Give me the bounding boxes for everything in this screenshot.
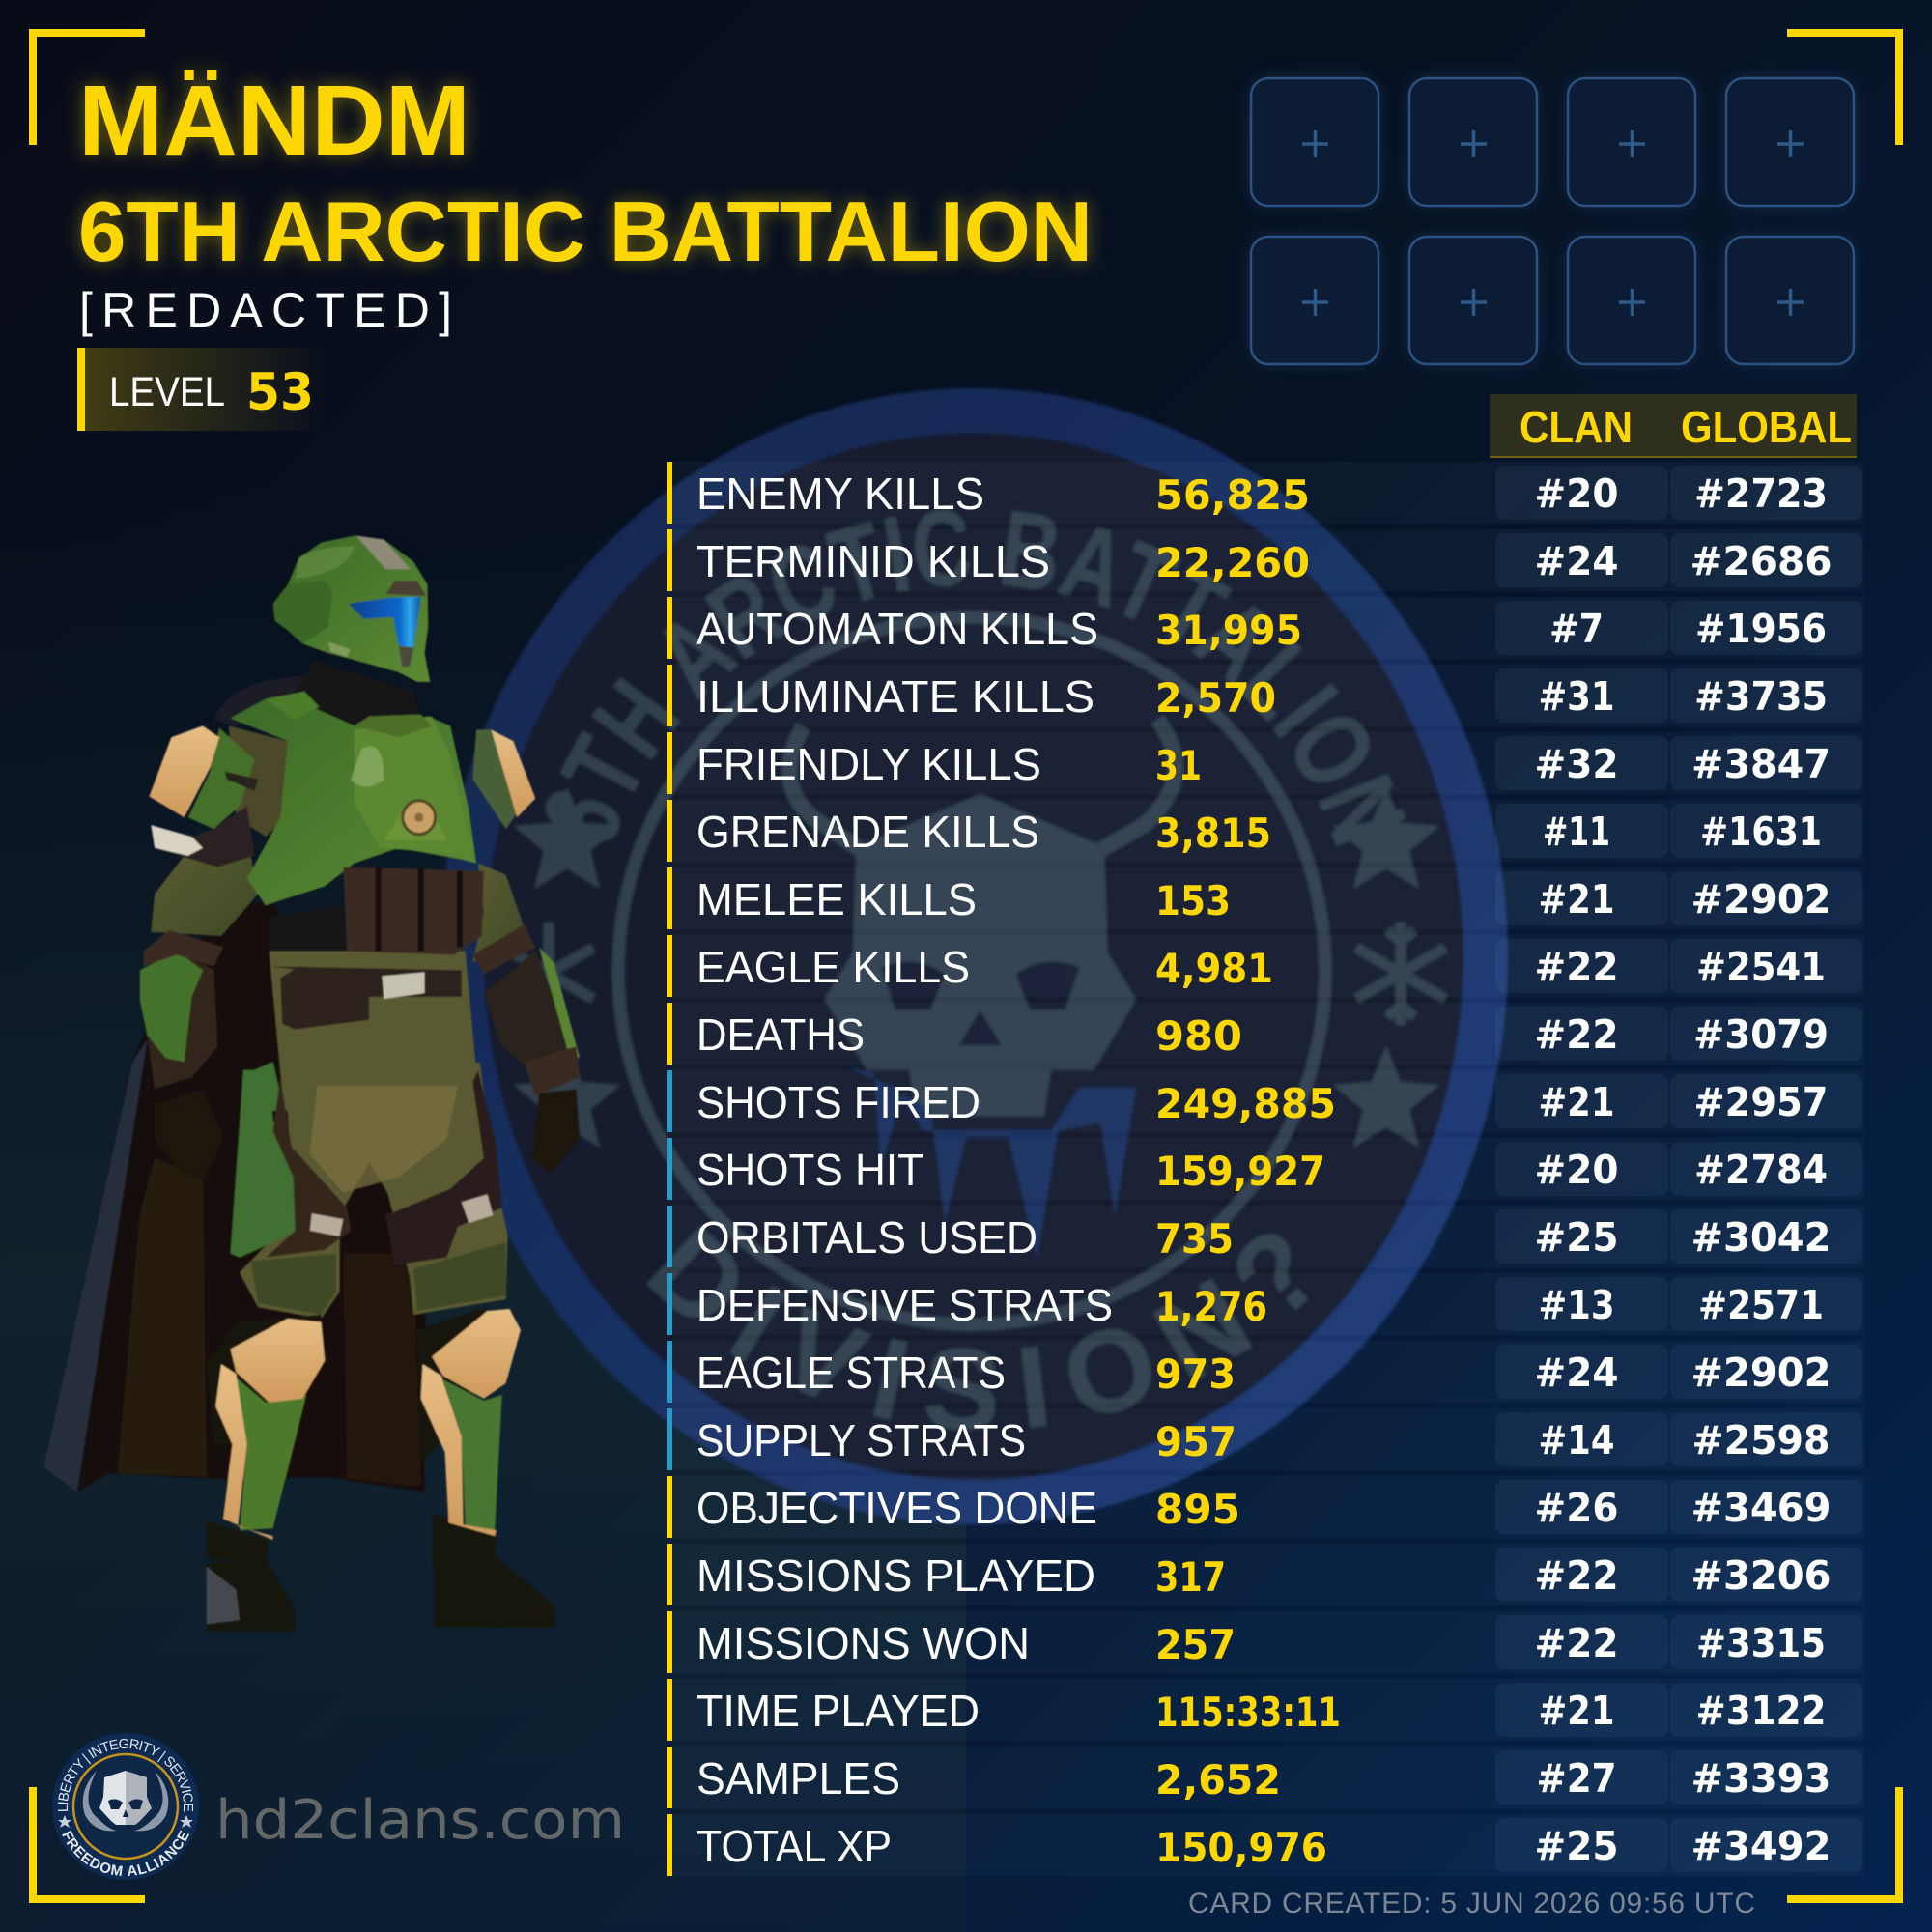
stat row: time played bbox=[667, 1679, 1864, 1741]
upper body bbox=[140, 536, 580, 1111]
stat row: friendly kills bbox=[667, 732, 1864, 794]
stat row: automaton kills: AUTOMATON KILLS bbox=[696, 604, 1098, 654]
stat row: shots fired: SHOTS FIRED bbox=[696, 1077, 980, 1127]
right arm bbox=[472, 864, 525, 962]
stat row: eagle strats: 973 bbox=[1155, 1350, 1236, 1398]
stat row: objectives done: #3469 bbox=[1690, 1485, 1832, 1531]
stat row: automaton kills bbox=[667, 597, 1864, 659]
redacted subtitle: [REDACTED] bbox=[79, 283, 452, 337]
stat row: grenade kills: #11 bbox=[1543, 809, 1610, 855]
logo skull eyes bbox=[108, 1799, 143, 1817]
stat row: friendly kills: 31 bbox=[1155, 742, 1202, 789]
rank column headers: CLAN bbox=[1520, 402, 1633, 452]
stat row: shots hit bbox=[667, 1138, 1864, 1200]
stat row: total xp: TOTAL XP bbox=[696, 1821, 892, 1871]
background watermark: 6th Arctic Battalion patch: 6TH ARCTIC BATTALION bbox=[545, 509, 1406, 846]
stat row: supply strats: #2598 bbox=[1692, 1417, 1830, 1463]
character: armored helldiver with cape bbox=[43, 536, 580, 1632]
stat row: shots hit: #20 bbox=[1534, 1147, 1619, 1193]
slot bbox=[1251, 237, 1378, 364]
level badge bbox=[77, 348, 328, 431]
stat row: melee kills: 153 bbox=[1155, 877, 1231, 924]
level badge: LEVEL bbox=[109, 369, 225, 415]
stat row: missions won bbox=[667, 1611, 1864, 1673]
stat row: missions played: MISSIONS PLAYED bbox=[696, 1550, 1095, 1601]
player name: MÄNDM bbox=[78, 65, 470, 176]
stat row: objectives done: 895 bbox=[1155, 1486, 1240, 1533]
stat row: shots fired: #21 bbox=[1538, 1079, 1615, 1125]
slot bbox=[1409, 78, 1537, 206]
stat row: samples: #27 bbox=[1536, 1755, 1617, 1802]
chest armor bbox=[231, 699, 476, 905]
stat row: eagle strats: #24 bbox=[1534, 1350, 1619, 1396]
stat row: objectives done bbox=[667, 1476, 1864, 1538]
stat row: supply strats bbox=[667, 1408, 1864, 1470]
stat row: missions won: MISSIONS WON bbox=[696, 1618, 1030, 1668]
stat row: missions won: #22 bbox=[1534, 1620, 1619, 1666]
shoulders bbox=[188, 727, 254, 829]
stat row: friendly kills: #32 bbox=[1534, 741, 1619, 787]
stat row: grenade kills: #1631 bbox=[1700, 809, 1822, 855]
stat row: automaton kills: #7 bbox=[1549, 606, 1604, 652]
stat row: missions played bbox=[667, 1544, 1864, 1605]
stat row: total xp: #3492 bbox=[1690, 1823, 1832, 1869]
corner bracket: bottom right bbox=[1787, 1787, 1899, 1899]
stat row: eagle kills: EAGLE KILLS bbox=[696, 942, 970, 992]
medal slots grid bbox=[1251, 78, 1854, 364]
stat row: illuminate kills: #31 bbox=[1538, 673, 1615, 720]
lower body bbox=[155, 1063, 580, 1632]
stat row: illuminate kills bbox=[667, 665, 1864, 726]
stat row: eagle strats bbox=[667, 1341, 1864, 1403]
corner bracket: bottom left bbox=[33, 1787, 145, 1899]
stat row: enemy kills: 56,825 bbox=[1155, 471, 1310, 519]
stat row: shots hit: #2784 bbox=[1694, 1147, 1828, 1193]
stat row: deaths: 980 bbox=[1155, 1012, 1242, 1060]
stat row: objectives done: #26 bbox=[1534, 1485, 1619, 1531]
stat row: time played: #3122 bbox=[1696, 1688, 1826, 1734]
stat row: time played: TIME PLAYED bbox=[696, 1686, 980, 1736]
stat row: automaton kills: 31,995 bbox=[1155, 607, 1302, 654]
clan name: 6TH ARCTIC BATTALION bbox=[78, 184, 1093, 279]
logo ring text: bottom: FREEDOM ALLIANCE bbox=[62, 1830, 189, 1876]
stat row: enemy kills: #2723 bbox=[1694, 470, 1828, 517]
slot bbox=[1726, 78, 1854, 206]
slot bbox=[1251, 78, 1378, 206]
stat row: melee kills: #2902 bbox=[1690, 876, 1832, 923]
stat row: illuminate kills: 2,570 bbox=[1155, 674, 1276, 722]
boots bbox=[207, 1559, 296, 1632]
stat row: enemy kills bbox=[667, 462, 1864, 524]
stat row: melee kills bbox=[667, 867, 1864, 929]
cape bbox=[43, 902, 426, 1492]
freedom alliance logo bbox=[52, 1733, 199, 1880]
logo stars bbox=[58, 1815, 193, 1828]
stat row: total xp bbox=[667, 1814, 1864, 1876]
stat row: supply strats: SUPPLY STRATS bbox=[696, 1415, 1026, 1465]
stat row: terminid kills: TERMINID KILLS bbox=[696, 536, 1050, 586]
background watermark: 6th Arctic Battalion patch bbox=[444, 386, 1509, 1526]
slot bbox=[1568, 78, 1695, 206]
stat row: eagle strats: #2902 bbox=[1690, 1350, 1832, 1396]
stat row: grenade kills: GRENADE KILLS bbox=[696, 807, 1039, 857]
stat row: friendly kills: #3847 bbox=[1691, 741, 1831, 787]
stat row: shots fired bbox=[667, 1070, 1864, 1132]
helmet bbox=[273, 536, 430, 682]
stat row: defensive strats: DEFENSIVE STRATS bbox=[696, 1280, 1113, 1330]
stat row: time played: #21 bbox=[1538, 1688, 1615, 1734]
stat row: missions won: #3315 bbox=[1696, 1620, 1826, 1666]
corner bracket: top right bbox=[1787, 33, 1899, 145]
stat row: illuminate kills: ILLUMINATE KILLS bbox=[696, 671, 1094, 722]
stat row: deaths bbox=[667, 1003, 1864, 1065]
stat row: terminid kills: #2686 bbox=[1690, 538, 1832, 584]
left arm bbox=[151, 837, 258, 936]
stat row: orbitals used: ORBITALS USED bbox=[696, 1212, 1037, 1263]
stat row: eagle kills: 4,981 bbox=[1155, 945, 1273, 992]
stat row: enemy kills: ENEMY KILLS bbox=[696, 469, 984, 519]
stat row: shots fired: 249,885 bbox=[1155, 1080, 1336, 1127]
stat row: supply strats: 957 bbox=[1155, 1418, 1236, 1465]
stat row: objectives done: OBJECTIVES DONE bbox=[696, 1483, 1097, 1533]
stat row: samples bbox=[667, 1747, 1864, 1808]
stat row: time played: 115:33:11 bbox=[1155, 1689, 1341, 1736]
stat row: orbitals used: 735 bbox=[1155, 1215, 1234, 1263]
stat row: deaths: DEATHS bbox=[696, 1009, 865, 1060]
card creation timestamp: CARD CREATED: 5 JUN 2026 09:56 UTC bbox=[1188, 1888, 1755, 1919]
stat row: eagle kills: #2541 bbox=[1696, 944, 1826, 990]
stat row: defensive strats: #13 bbox=[1538, 1282, 1615, 1328]
stat row: samples: #3393 bbox=[1690, 1755, 1832, 1802]
stat row: terminid kills bbox=[667, 529, 1864, 591]
stat row: defensive strats: #2571 bbox=[1698, 1282, 1824, 1328]
website watermark: hd2clans.com bbox=[215, 1789, 625, 1852]
stat row: grenade kills: 3,815 bbox=[1155, 810, 1271, 857]
stat row: shots hit: SHOTS HIT bbox=[696, 1145, 923, 1195]
stat row: missions played: 317 bbox=[1155, 1553, 1226, 1601]
stat row: grenade kills bbox=[667, 800, 1864, 862]
stat row: supply strats: #14 bbox=[1538, 1417, 1615, 1463]
gloves bbox=[155, 1090, 223, 1181]
slot bbox=[1568, 237, 1695, 364]
stat row: samples: 2,652 bbox=[1155, 1756, 1281, 1804]
stat row: automaton kills: #1956 bbox=[1695, 606, 1827, 652]
stat row: eagle strats: EAGLE STRATS bbox=[696, 1348, 1006, 1398]
stat row: terminid kills: #24 bbox=[1534, 538, 1619, 584]
stat row: shots hit: 159,927 bbox=[1155, 1148, 1325, 1195]
stat row: eagle kills bbox=[667, 935, 1864, 997]
rank column headers: GLOBAL bbox=[1681, 402, 1852, 452]
stat row: terminid kills: 22,260 bbox=[1155, 539, 1310, 586]
vest pouches and belt bbox=[270, 905, 347, 952]
stat row: missions played: #3206 bbox=[1690, 1552, 1832, 1599]
stat row: illuminate kills: #3735 bbox=[1694, 673, 1828, 720]
stat row: defensive strats: 1,276 bbox=[1155, 1283, 1267, 1330]
stat row: total xp: 150,976 bbox=[1155, 1824, 1327, 1871]
stat row: missions played: #22 bbox=[1534, 1552, 1619, 1599]
logo skull bbox=[99, 1771, 152, 1825]
stat row: orbitals used bbox=[667, 1206, 1864, 1267]
stat row: missions won: 257 bbox=[1155, 1621, 1236, 1668]
logo ring text: top: LIBERTY | INTEGRITY | SERVICE bbox=[58, 1739, 193, 1812]
corner bracket: top left bbox=[33, 33, 145, 145]
stat row: samples: SAMPLES bbox=[696, 1753, 900, 1804]
rank column headers bbox=[1490, 394, 1857, 458]
slot bbox=[1409, 237, 1537, 364]
level badge: 53 bbox=[246, 363, 314, 422]
stat row: deaths: #22 bbox=[1534, 1011, 1619, 1058]
logo wreath bbox=[83, 1771, 168, 1831]
stat row: orbitals used: #25 bbox=[1534, 1214, 1619, 1261]
stat row: melee kills: #21 bbox=[1538, 876, 1615, 923]
stat row: eagle kills: #22 bbox=[1534, 944, 1619, 990]
stat row: orbitals used: #3042 bbox=[1690, 1214, 1832, 1261]
stat row: shots fired: #2957 bbox=[1694, 1079, 1828, 1125]
stat row: melee kills: MELEE KILLS bbox=[696, 874, 977, 924]
stat row: friendly kills: FRIENDLY KILLS bbox=[696, 739, 1041, 789]
lower legs bbox=[207, 1307, 497, 1567]
stat row: total xp: #25 bbox=[1534, 1823, 1619, 1869]
stat row: defensive strats bbox=[667, 1273, 1864, 1335]
stat row: deaths: #3079 bbox=[1693, 1011, 1829, 1058]
slot bbox=[1726, 237, 1854, 364]
background watermark: 6th Arctic Battalion patch: DIVISION? bbox=[646, 1225, 1308, 1432]
stat row: enemy kills: #20 bbox=[1534, 470, 1619, 517]
